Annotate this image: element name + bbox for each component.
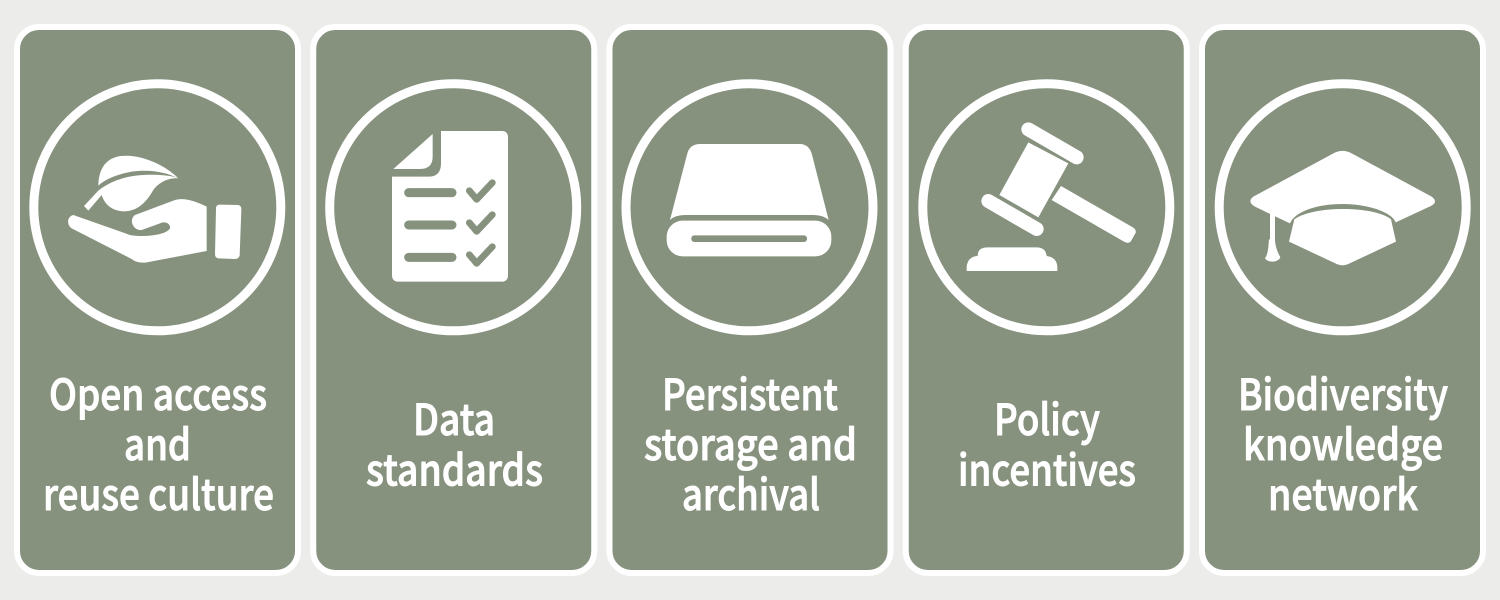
label: persistent storage and archival: archival — [682, 462, 820, 523]
label: open access and reuse culture: reuse culture — [43, 462, 274, 523]
label: persistent storage and archival: storage and — [644, 412, 857, 473]
label: persistent storage and archival: Persistent — [662, 362, 838, 423]
icon: storage drive — [626, 84, 873, 331]
panel: policy incentives — [906, 27, 1187, 573]
label: biodiversity knowledge network: Biodiversity — [1238, 362, 1448, 423]
icon: checklist document — [330, 84, 577, 331]
label: policy incentives: Policy — [994, 387, 1100, 448]
label: data standards: Data — [413, 387, 495, 448]
label: persistent storage and archival — [644, 362, 857, 523]
label: open access and reuse culture: Open access — [49, 362, 267, 423]
icon: hand holding leaf — [34, 84, 281, 331]
label: open access and reuse culture: and — [124, 412, 191, 473]
label: data standards — [366, 387, 543, 498]
label: biodiversity knowledge network — [1238, 362, 1448, 523]
icon: gavel — [923, 84, 1170, 331]
label: policy incentives: incentives — [958, 438, 1136, 498]
panel: biodiversity knowledge network — [1202, 27, 1483, 573]
label: biodiversity knowledge network: knowledge — [1243, 412, 1443, 473]
label: data standards: standards — [366, 438, 543, 498]
label: open access and reuse culture — [43, 362, 274, 523]
panel: open access and reuse culture — [17, 27, 298, 573]
label: policy incentives — [958, 387, 1136, 498]
panel: data standards — [313, 27, 594, 573]
label: biodiversity knowledge network: network — [1268, 462, 1418, 523]
panel: persistent storage and archival — [610, 27, 890, 573]
icon: graduation cap — [1219, 84, 1466, 331]
